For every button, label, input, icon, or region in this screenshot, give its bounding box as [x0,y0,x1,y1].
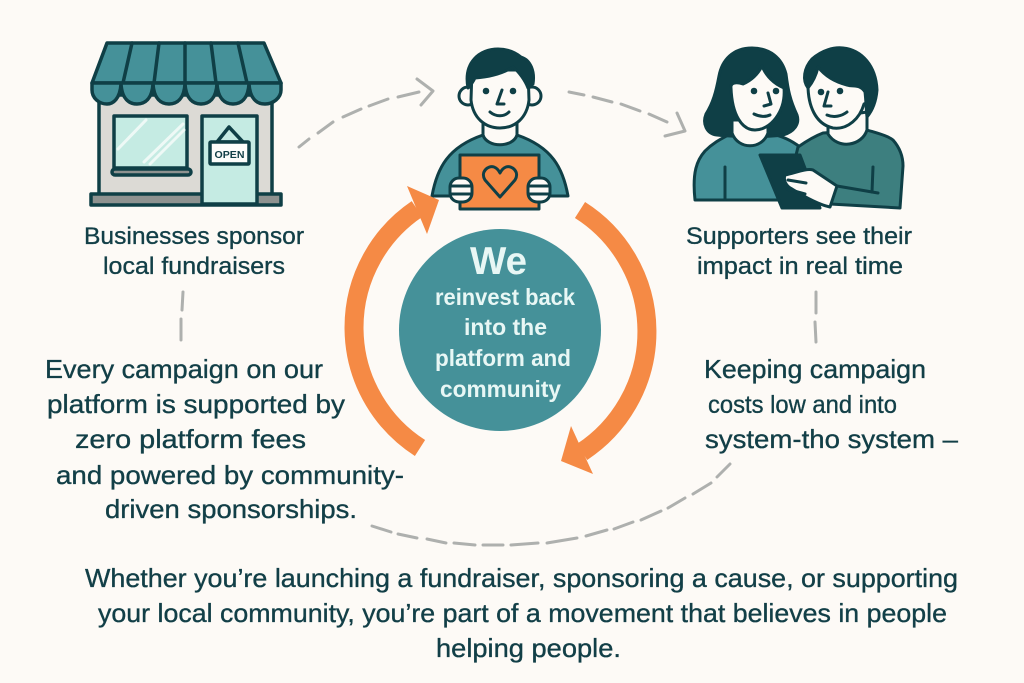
woman body [694,133,800,200]
text block: right cost description: costs low and into [708,391,897,419]
woman neck and face [732,120,768,146]
icon: two supporters with tablet [694,48,903,208]
arrow: dashed lower curve [372,464,730,545]
hand [784,170,837,207]
text block: right cost description: Keeping campaign [704,354,926,384]
arrow: right orange cycle arrow [561,210,647,474]
text block: left campaign description [45,354,404,524]
text block: left campaign description: zero platform fees [75,424,306,454]
center body text: platform and [435,345,571,371]
text block: left campaign description: platform is supported by [47,389,345,419]
center body text: into the [464,314,547,340]
center body text [435,284,575,402]
man body [790,130,903,208]
arrow: left orange cycle arrow [354,186,439,448]
icon: person holding heart sign [432,49,568,209]
text block: left campaign description: Every campaign on our [45,354,323,384]
text block: right cost description: system-tho system – [705,424,959,454]
center heading: We [470,240,527,283]
heading: supporters caption: Supporters see their [686,223,912,250]
man hair [805,48,877,117]
center body text: community [440,376,561,402]
tablet [760,155,820,208]
text block: closing statement [85,563,958,663]
man face [828,112,867,144]
heading: supporters caption: impact in real time [697,253,903,280]
text block: left campaign description: and powered by community- [56,460,404,490]
open sign text: OPEN [214,149,244,161]
text block: left campaign description: driven sponsorships. [105,494,357,524]
center body text: reinvest back [435,284,575,310]
arrow: dashed shop to person [299,79,433,147]
heading: businesses caption: local fundraisers [103,253,285,280]
text block: closing statement: helping people. [436,633,621,663]
heading: supporters caption [686,223,912,280]
heading: businesses caption: Businesses sponsor [84,223,304,250]
text block: closing statement: Whether you’re launching a fundraiser, sponsoring a cause, or supporting [85,563,958,593]
text block: closing statement: your local community, you’re part of a movement that believes in people [98,598,947,628]
arrow: right dashed connector [815,292,816,342]
icon: storefront [91,43,281,205]
arrow: dashed person to supporters [569,92,685,136]
panel: central reinvest circle [399,229,601,431]
woman hair [705,48,798,136]
text block: right cost description [704,354,959,454]
arrow: left dashed connector [181,292,183,340]
heading: businesses caption [84,223,304,280]
